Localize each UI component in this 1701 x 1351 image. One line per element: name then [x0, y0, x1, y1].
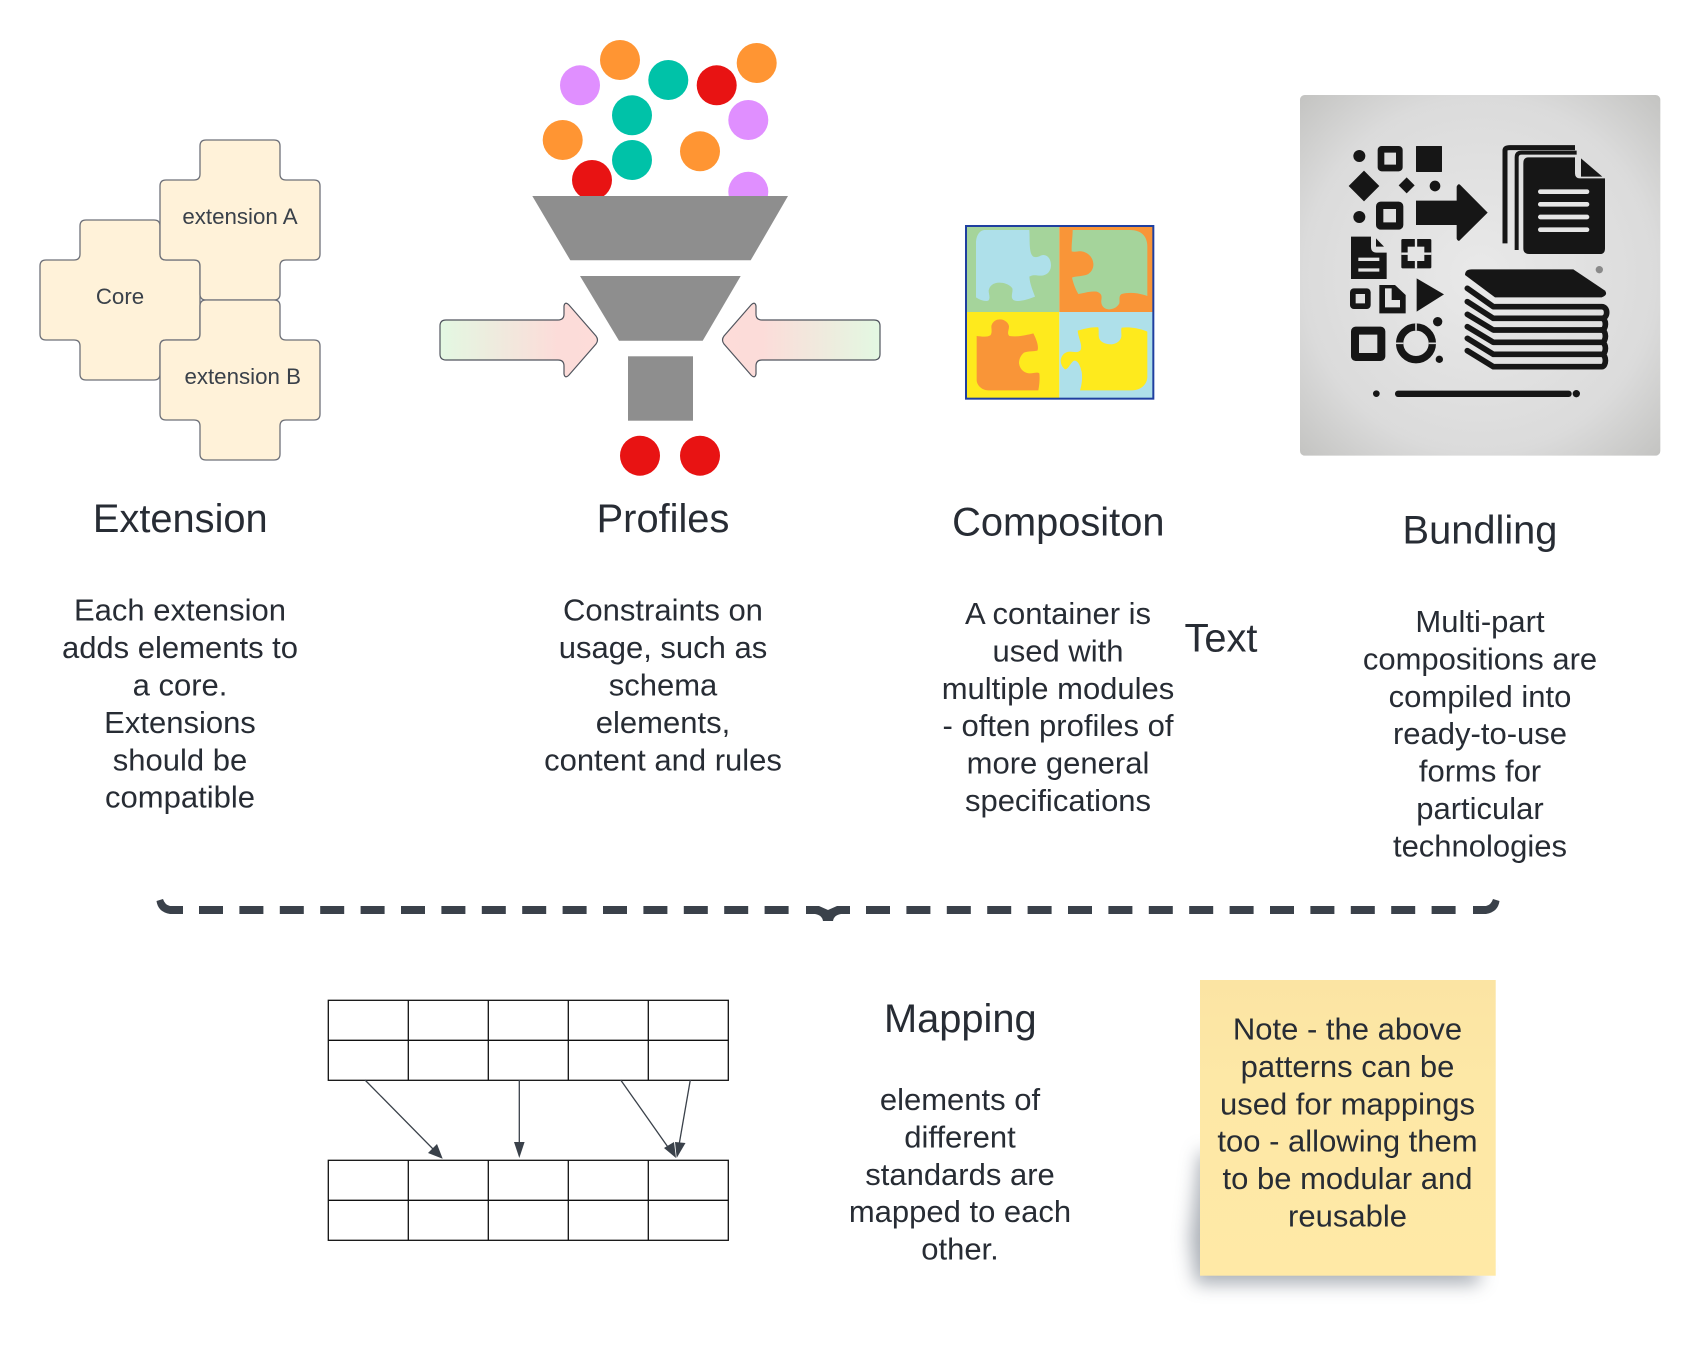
text: bundling description: particular — [1416, 791, 1544, 826]
sticky note: too - allowing them — [1217, 1124, 1478, 1159]
shape: core — [40, 220, 200, 380]
text: bundling description: ready-to-use — [1393, 716, 1567, 751]
text: mapping description: elements of — [880, 1082, 1041, 1117]
shape: extension B: extension B — [184, 364, 301, 389]
sticky note: used for mappings — [1220, 1086, 1475, 1121]
heading: composition: Compositon — [952, 500, 1164, 544]
bundling image — [1300, 95, 1660, 456]
shape: core: Core — [96, 284, 144, 309]
text: bundling description: compiled into — [1389, 679, 1571, 714]
sticky note: to be modular and — [1223, 1161, 1472, 1196]
text: mapping description: standards are — [865, 1157, 1055, 1192]
text: extension description: a core. — [133, 668, 227, 702]
heading: extension: Extension — [93, 497, 268, 541]
text: mapping description: other. — [921, 1232, 999, 1267]
text: extension description: should be — [113, 742, 247, 777]
paper stack — [1465, 269, 1607, 367]
text: profiles description: schema — [609, 668, 718, 702]
text: bundling description: compositions are — [1363, 641, 1597, 676]
piece: orange — [977, 319, 1040, 390]
brace connector — [156, 899, 1500, 921]
text: mapping description: mapped to each — [849, 1194, 1071, 1229]
extension diagram — [40, 140, 320, 460]
arrow: right constraint — [722, 303, 880, 377]
text: profiles description: usage, such as — [559, 630, 767, 665]
piece: green — [1072, 230, 1147, 309]
arrow: left constraint — [440, 303, 598, 377]
arrows: element mappings — [365, 1080, 690, 1159]
text: composition description: specifications — [965, 783, 1151, 818]
text: bundling description: Multi-part — [1415, 604, 1545, 639]
shape: extension A: extension A — [182, 204, 298, 229]
text: composition description: A container is — [965, 596, 1151, 631]
mapping diagram — [328, 1000, 728, 1240]
text: extension description: Extensions — [104, 705, 256, 740]
text: composition description: multiple modules — [942, 671, 1174, 706]
table: target — [328, 1160, 728, 1240]
piece: yellow — [1061, 327, 1147, 390]
funnel body — [532, 196, 788, 421]
table: source — [328, 1000, 728, 1080]
piece: blue — [976, 230, 1051, 301]
text: bundling description: forms for — [1419, 754, 1541, 789]
text: profiles description: elements, — [596, 705, 730, 740]
sticky note: reusable — [1288, 1198, 1407, 1234]
text: composition description: - often profiles of — [943, 708, 1174, 743]
text: extension description: adds elements to — [62, 630, 298, 665]
text: extension description: compatible — [105, 780, 255, 815]
shape: extension A — [160, 140, 320, 300]
funnel diagram — [440, 40, 880, 476]
sticky note: patterns can be — [1241, 1049, 1454, 1084]
shape: extension B — [160, 300, 320, 460]
input circles — [543, 40, 777, 212]
text: profiles description: content and rules — [544, 742, 782, 777]
text: extension description: Each extension — [74, 593, 286, 628]
text: mapping description: different — [904, 1119, 1016, 1154]
heading: bundling: Bundling — [1403, 509, 1557, 553]
sticky note — [1190, 980, 1496, 1284]
text: composition description: used with — [993, 633, 1123, 668]
sticky note: Note - the above — [1233, 1011, 1462, 1046]
text: composition description: more general — [967, 746, 1149, 781]
text: bundling description: technologies — [1393, 828, 1567, 863]
text: profiles description: Constraints on — [563, 593, 763, 628]
stray text label: Text — [1184, 617, 1258, 661]
heading: mapping: Mapping — [884, 997, 1037, 1041]
output circles — [620, 436, 720, 476]
document stack — [1505, 148, 1605, 254]
puzzle image — [966, 226, 1153, 399]
heading: profiles: Profiles — [597, 497, 729, 541]
baseline bar — [1373, 390, 1580, 397]
big arrow — [1416, 184, 1488, 241]
small shapes — [1349, 146, 1444, 363]
